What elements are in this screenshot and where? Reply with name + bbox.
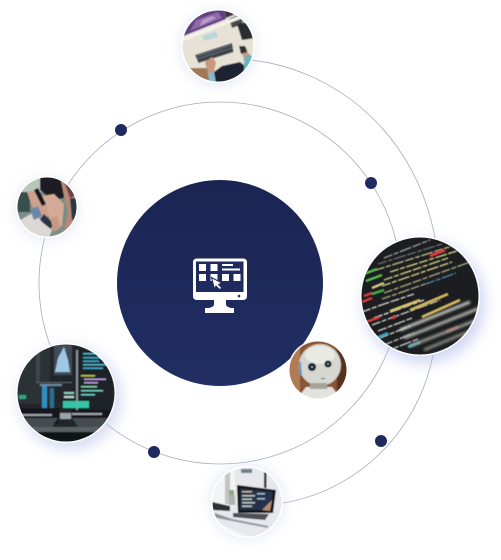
- central circle: [117, 180, 323, 386]
- orbit rings: [39, 60, 437, 503]
- photo: laptop on desk: [211, 466, 283, 538]
- photo: phones in hands: [16, 176, 78, 240]
- photo: code on screen: [360, 236, 485, 363]
- photo: desktop monitors with code: [16, 343, 121, 449]
- photo: hands on keyboard: [180, 6, 256, 85]
- photo: white robot: [288, 340, 348, 400]
- node dots: [115, 124, 387, 458]
- icon: computer monitor with cursor: [193, 258, 247, 313]
